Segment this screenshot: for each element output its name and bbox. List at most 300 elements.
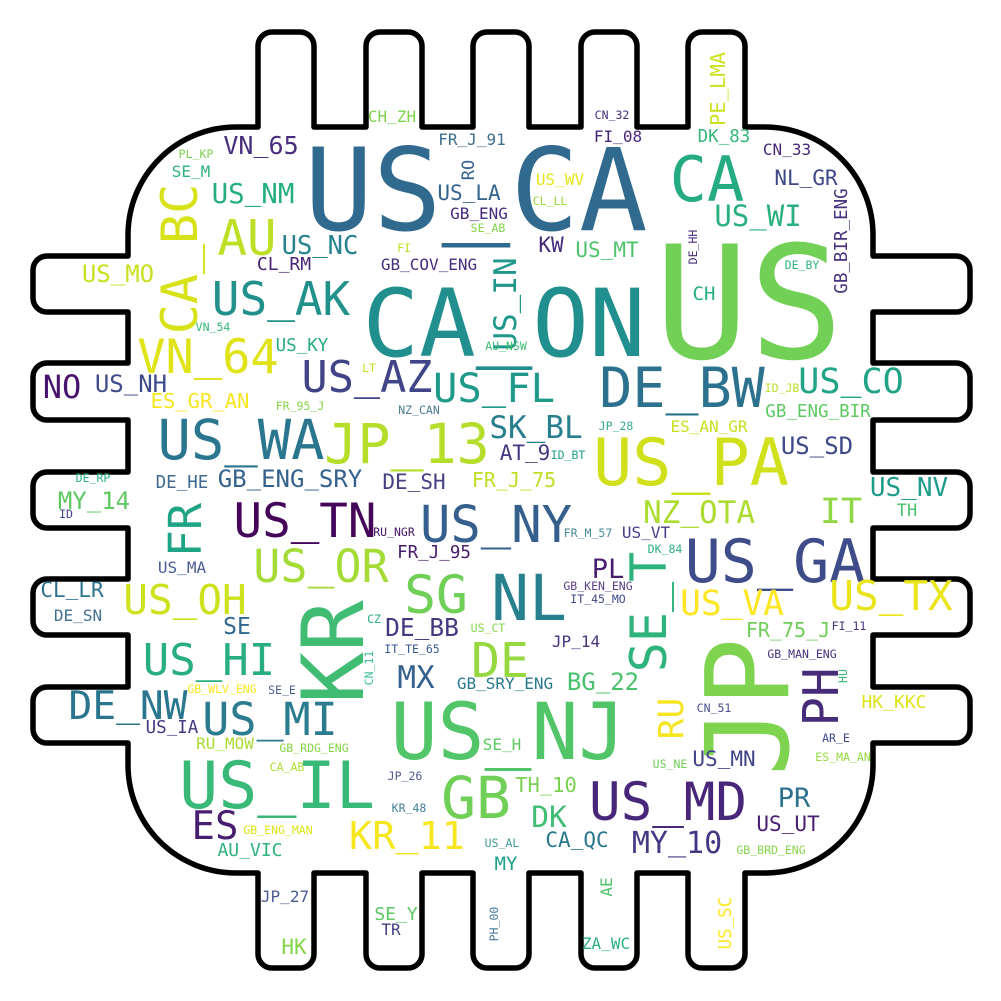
word: DE_SN: SN [83, 606, 102, 625]
word: HK: HK [281, 935, 307, 959]
word: US_KY: _ [297, 335, 308, 355]
word: US_WV: US [536, 170, 555, 189]
word: US_NH: _ [124, 368, 139, 396]
word: CH_ZH: CH [368, 107, 387, 126]
word: US_MI: MI [284, 693, 338, 746]
word: MX: MX [397, 660, 435, 696]
word: FR_95_J: 95 [297, 399, 310, 413]
word: US_CT: CT [491, 621, 505, 635]
word: PE_LMA: LMA [706, 52, 730, 89]
word: FR_J_91: FR [438, 130, 458, 149]
word: AU: AU [217, 210, 277, 267]
word: JP_14: JP [552, 632, 571, 651]
word: US_WV: WV [565, 170, 584, 189]
word: TH_10: 10 [552, 773, 577, 797]
word: SK_BL: SK [489, 410, 527, 446]
word: AR_E: _ [836, 730, 843, 744]
word: US_GA: _ [757, 522, 794, 592]
word: SE_AB: AB [491, 221, 505, 235]
word: CH: CH [693, 283, 715, 305]
word: FR_M_57: M [585, 526, 592, 540]
word: FR_J_91: _ [458, 129, 468, 148]
word: FR_J_75: _ [520, 466, 533, 490]
word: GB_BIR_ENG: BIR [832, 230, 852, 262]
word: CN_33: CN [763, 140, 782, 159]
word: CN_32: CN [595, 108, 609, 122]
word: JP_27: _ [280, 886, 290, 905]
word: US_MD: _ [652, 768, 684, 829]
word: GB_RDG_ENG: _ [321, 740, 328, 754]
word: CA_AB: _ [284, 759, 291, 773]
word: GB_RDG_ENG: _ [293, 740, 300, 754]
word: US_IN: IN [488, 257, 524, 295]
word: CL_RM: _ [279, 252, 290, 273]
word: CA_BC: CA [151, 274, 209, 334]
word: DK_84: DK [648, 542, 662, 556]
word: DK_84: _ [662, 541, 669, 555]
word: DK_83: DK [698, 127, 719, 147]
word: RU_NGR: _ [387, 524, 394, 538]
word: US_CA: CA [510, 124, 648, 257]
word: GB_ENG_MAN: GB [243, 823, 257, 837]
word: ID_JB: _ [779, 380, 786, 394]
word: CL_LR: CL [40, 578, 66, 602]
word: FR_J_95: 95 [450, 543, 471, 563]
word: NL_GR: GR [812, 166, 838, 190]
word: US_OR: OR [335, 540, 390, 593]
word: US_NH: US [95, 370, 124, 398]
word: ID_BT: ID [551, 448, 565, 462]
word: US_MO: MO [125, 260, 154, 288]
word: GB_ENG_SRY: SRY [319, 465, 363, 493]
word: CN_32: 32 [615, 108, 629, 122]
word: RO: RO [459, 160, 479, 180]
word: JP_14: _ [571, 631, 581, 650]
word: CA_BC: _ [147, 243, 205, 274]
word: GB_BIR_ENG: _ [831, 262, 851, 273]
word: US_IL: _ [257, 743, 297, 818]
word: PE_LMA: _ [704, 88, 728, 101]
word: DE_BW: BW [699, 356, 766, 420]
word: RU: RU [652, 698, 692, 739]
word: IT_TE_65: IT [384, 642, 398, 656]
word: US_VT: VT [651, 523, 670, 542]
word: US_LA: US [437, 181, 463, 205]
word: GB_BRD_ENG: ENG [785, 843, 806, 857]
word: GB_ENG_SRY: _ [304, 463, 319, 491]
word: CN_32: _ [609, 107, 616, 121]
word: US_MO: US [82, 260, 111, 288]
word: JP_27: JP [261, 887, 280, 906]
word: CH_ZH: _ [387, 106, 397, 125]
word: MY_10: MY [632, 826, 668, 861]
word: US_CO: _ [840, 359, 862, 399]
word: DE_SH: _ [408, 468, 421, 492]
word: DE_RP: DE [76, 471, 90, 485]
word: TH: TH [897, 501, 917, 521]
word: KR_48: 48 [412, 801, 426, 815]
word: VN_64: 64 [222, 330, 279, 385]
word: AU_VIC: VIC [250, 840, 283, 861]
word: GB_SRY_ENG: _ [476, 673, 486, 692]
word: US_MT: MT [613, 238, 639, 262]
word: DK: DK [531, 800, 567, 834]
word: US_TN: US [233, 494, 291, 549]
word: CA_BC: BC [151, 184, 209, 244]
word: US_TX: US [829, 572, 879, 620]
word: GB_ENG_BIR: ENG [797, 402, 829, 422]
word: KW: KW [538, 233, 564, 257]
word: DK_83: _ [719, 126, 730, 146]
word: GB_ENG_SRY: GB [218, 465, 247, 493]
word: US_FL: US [433, 364, 482, 412]
word: AT_9: AT [500, 441, 525, 465]
word: JP_28: _ [613, 418, 620, 432]
word: US_NJ: NJ [531, 688, 625, 778]
word: US_FL: _ [482, 361, 507, 409]
word: GB_MAN_ENG: _ [809, 646, 816, 660]
word: GB_BRD_ENG: _ [778, 842, 785, 856]
word: CA_ON: _ [476, 262, 533, 371]
word: ES_AN_GR: _ [719, 416, 729, 435]
word: US_IL: US [179, 749, 257, 824]
word: DE_HH: HH [686, 230, 700, 244]
word: US_OR: US [253, 540, 307, 593]
word: JP_13: 13 [424, 412, 490, 476]
word: ID: ID [59, 507, 73, 521]
word: US_PA: US [593, 426, 671, 501]
word: VN_54: VN [196, 320, 210, 334]
word: AT_9: _ [525, 439, 538, 463]
word: FR_95_J: _ [290, 398, 297, 412]
word: KR_48: _ [406, 800, 413, 814]
word: US_NV: US [870, 473, 901, 503]
word: US_TN: _ [291, 490, 320, 545]
word: PH: PH [793, 667, 850, 727]
word: SK_BL: _ [527, 407, 546, 443]
word: US_UT: UT [794, 812, 820, 836]
word: US_OH: OH [197, 576, 247, 624]
word: SE_T: _ [616, 581, 674, 612]
word: US_SC: _ [715, 917, 735, 928]
word: FI: FI [397, 241, 411, 255]
word: ES_AN_GR: ES [670, 417, 690, 436]
word: CN_33: 33 [792, 140, 811, 159]
word: CN_11: CN [362, 671, 376, 685]
word: FR_J_91: J [467, 130, 477, 149]
word: PH_00: _ [486, 920, 500, 927]
word: PL_KP: KP [199, 147, 213, 161]
word: PR: PR [778, 783, 811, 814]
word: CA_ON: ON [532, 270, 645, 379]
word: ES_MA_AN: AN [857, 750, 871, 764]
word: CL_RM: RM [289, 254, 311, 275]
word: US_VA: _ [722, 581, 743, 621]
word: US_OR: _ [307, 536, 335, 589]
word: US_MA: _ [177, 557, 187, 576]
word: NZ_OTA: _ [680, 492, 699, 528]
word: IT: IT [820, 492, 862, 532]
word: FR_95_J: FR [276, 399, 290, 413]
word: GB_KEN_ENG: ENG [612, 579, 633, 593]
word: MY_10: _ [668, 823, 687, 858]
word: US_OH: US [123, 576, 173, 624]
word: US_NV: NV [917, 473, 948, 503]
word: GB_ENG_MAN: ENG [264, 823, 285, 837]
word: ES_GR_AN: GR [188, 389, 213, 413]
word: FR_J_95: _ [418, 542, 429, 562]
word: GB_COV_ENG: GB [381, 255, 400, 274]
word: GB_ENG_BIR: _ [829, 401, 840, 421]
word: HU: HU [836, 669, 850, 683]
word: SE_AB: _ [485, 220, 492, 234]
word: SE_M: _ [191, 161, 201, 180]
word: DE_BB: BB [429, 613, 459, 642]
word: FR_M_57: _ [591, 525, 598, 539]
word: DE_BB: _ [415, 611, 430, 640]
word: DE_BY: _ [799, 257, 806, 271]
word: GB_WLV_ENG: GB [187, 682, 201, 696]
word: ES_AN_GR: AN [699, 417, 719, 436]
word: NZ_CAN: CAN [419, 403, 440, 417]
word: FR_J_91: 91 [486, 130, 506, 149]
word: CA_QC: CA [545, 828, 571, 852]
word: US_NC: _ [312, 229, 328, 259]
word: GB: GB [441, 764, 511, 832]
word: NO: NO [43, 368, 81, 406]
word: FR_95_J: _ [310, 398, 317, 412]
word: US_TX: _ [879, 569, 904, 617]
word: KR_11: _ [395, 811, 419, 856]
word: SE_M: M [201, 162, 210, 181]
word: FI_08: FI [594, 127, 613, 146]
word: US_SD: US [781, 432, 810, 460]
word: US_SC: US [716, 928, 736, 949]
word: FR_J_75: _ [496, 466, 509, 490]
word: NL_GR: _ [800, 164, 813, 188]
word: GB_ENG: _ [469, 203, 479, 222]
word: SE_H: SE [483, 735, 502, 754]
word: GB_ENG_SRY: ENG [261, 465, 304, 493]
word: DE_HH: DE [686, 250, 700, 264]
word: GB_COV_ENG: _ [400, 254, 410, 273]
word: US_LA: _ [463, 179, 476, 203]
word: US_PA: _ [671, 420, 711, 495]
word: DE_BY: BY [805, 258, 819, 272]
word: GB_KEN_ENG: _ [577, 578, 584, 592]
word: HK_KKC: KKC [894, 692, 927, 713]
word: GB_ENG: GB [450, 204, 469, 223]
word: JP_26: 26 [408, 769, 422, 783]
word: US_IL: IL [297, 749, 375, 824]
word: GB_RDG_ENG: ENG [328, 741, 349, 755]
word: US_NE: US [653, 757, 667, 771]
word: US_AK: AK [295, 272, 351, 326]
word: FR_95_J: J [317, 399, 324, 413]
word: GB_SRY_ENG: _ [515, 673, 525, 692]
word: BG_22: 22 [610, 668, 639, 696]
word: US_HI: _ [196, 631, 223, 682]
word: MY_14: 14 [101, 487, 130, 515]
word: GB_RDG_ENG: GB [279, 741, 293, 755]
word: US_FL: FL [506, 364, 555, 412]
word: SE_Y: SE [374, 904, 396, 925]
word: US_MN: US [692, 747, 718, 771]
word: LT: LT [362, 361, 376, 375]
word: PL_KP: PL [179, 147, 193, 161]
word: GB_ENG_BIR: BIR [839, 402, 871, 422]
word: US_AL: _ [499, 835, 506, 849]
word: MY: MY [495, 853, 518, 875]
word: US_IA: _ [167, 717, 178, 737]
word: US: US [654, 213, 844, 396]
word: GB_MAN_ENG: MAN [788, 647, 809, 661]
word: CL_RM: CL [257, 254, 279, 275]
word: FI_11: 11 [852, 619, 866, 633]
word: US_SD: SD [824, 432, 853, 460]
word: DE_HE: DE [156, 473, 177, 493]
word: US_WA: _ [224, 403, 258, 468]
word: JP_13: JP [324, 412, 390, 476]
word: HK_KKC: _ [883, 690, 894, 711]
word: JP_26: _ [402, 768, 409, 782]
word: CN_11: _ [361, 664, 375, 671]
word: AU_NSW: _ [499, 338, 506, 352]
word: US_MI: US [202, 693, 256, 746]
word: US_TX: TX [903, 572, 953, 620]
word: DE_NW: DE [69, 683, 116, 729]
word: SE_H: _ [502, 734, 512, 753]
word: DE_HE: HE [187, 473, 208, 493]
word: SE: SE [223, 614, 251, 640]
word: US_NJ: _ [485, 681, 532, 771]
word: NZ_CAN: _ [412, 402, 419, 416]
word: CH_ZH: ZH [397, 107, 416, 126]
word: GB_RDG_ENG: RDG [300, 741, 321, 755]
word: VN_65: _ [253, 129, 269, 158]
word: US_WI: WI [767, 199, 802, 233]
word: AU_VIC: AU [217, 840, 239, 861]
word: ZA_WC: _ [601, 933, 611, 952]
word: DE_BW: DE [599, 356, 665, 420]
word: TH_10: TH [515, 773, 540, 797]
word: US_GA: US [685, 527, 757, 597]
word: US_MD: US [589, 772, 652, 833]
word: FR_J_75: FR [472, 468, 496, 492]
word: AT_9: 9 [538, 441, 550, 465]
word: ES_GR_AN: ES [151, 389, 175, 413]
word: GB_ENG: ENG [479, 204, 508, 223]
word: DE_NW: _ [116, 680, 140, 726]
word: US_WV: _ [555, 169, 565, 188]
word: CA_ON: CA [363, 270, 476, 379]
word: DE_BW: _ [665, 351, 699, 415]
word: US_MA: MA [187, 558, 206, 577]
word: US_NY: _ [481, 491, 512, 550]
word: US_CA: _ [442, 114, 511, 247]
word: SK_BL: BL [545, 410, 583, 446]
word: IT_45_MO: 45 [591, 592, 605, 606]
word: CN_11: 11 [362, 651, 376, 665]
word: GB_ENG_SRY: _ [247, 463, 262, 491]
word: US_AL: AL [505, 836, 519, 850]
word: CL_LR: _ [66, 576, 79, 600]
word: IT_45_MO: IT [570, 592, 584, 606]
word: SG: SG [404, 565, 468, 626]
word: AU_NSW: AU [485, 339, 499, 353]
word: AU_VIC: _ [239, 838, 250, 859]
word: KR_11: KR [349, 814, 395, 859]
word: US_IA: US [146, 718, 167, 738]
word: TR: TR [381, 920, 401, 939]
word: BG_22: _ [596, 666, 611, 694]
word: CA_AB: CA [270, 760, 284, 774]
word: US_MN: _ [718, 745, 731, 769]
word: US_MO: _ [111, 258, 126, 286]
word: DE_SN: _ [73, 605, 83, 624]
word: GB_ENG_MAN: MAN [292, 823, 313, 837]
word: JP_13: _ [390, 407, 424, 471]
word: GB_KEN_ENG: GB [563, 579, 577, 593]
word: SE_E: _ [282, 682, 289, 696]
word: ES_GR_AN: _ [175, 387, 188, 411]
word: GB_ENG_MAN: _ [285, 822, 292, 836]
word: US_CT: US [471, 621, 485, 635]
word: DE_HE: _ [177, 472, 188, 492]
word: FR_75_J: _ [770, 616, 783, 640]
word: CL_LR: LR [78, 578, 104, 602]
word: JP_27: 27 [290, 887, 309, 906]
word: DE_HH: _ [685, 243, 699, 250]
word: SE_T: SE [620, 612, 678, 672]
word: US_HI: HI [222, 635, 275, 686]
word: CN_51: _ [711, 700, 718, 714]
word: IT_TE_65: _ [419, 641, 426, 655]
word: AU_NSW: NSW [506, 339, 527, 353]
word: CL_LL: _ [547, 193, 554, 207]
word: FI_11: _ [846, 618, 853, 632]
word: DE_SN: DE [54, 606, 73, 625]
word: PL: PL [592, 554, 624, 585]
word: FR_J_95: _ [439, 542, 450, 562]
word: US_NY: US [420, 495, 481, 554]
word: DE_SH: SH [420, 470, 446, 494]
word: CN_33: _ [782, 139, 792, 158]
word: SE_H: H [512, 735, 521, 754]
word: DE_RP: _ [90, 470, 97, 484]
word: US_KY: US [276, 336, 297, 356]
word: ES_MA_AN: _ [829, 749, 836, 763]
word: ES_AN_GR: GR [728, 417, 748, 436]
word: AE: AE [597, 877, 616, 897]
word: IT_45_MO: _ [605, 591, 612, 605]
word: ZA_WC: WC [611, 934, 630, 953]
word: VN_64: _ [194, 326, 223, 381]
word: US_MN: MN [730, 747, 756, 771]
word: JP: JP [682, 638, 816, 776]
word: FR: FR [159, 502, 212, 557]
word: US_CO: CO [862, 362, 904, 402]
word: CN_51: 51 [717, 701, 731, 715]
word: NL_GR: NL [774, 166, 800, 190]
word: SE_AB: SE [471, 221, 485, 235]
word: US_VT: US [622, 523, 641, 542]
word: IT_45_MO: _ [584, 591, 591, 605]
word: US_NJ: US [391, 688, 485, 778]
word: JP_26: JP [388, 769, 402, 783]
word: MY_10: 10 [686, 826, 722, 861]
word: CA_AB: AB [290, 760, 304, 774]
